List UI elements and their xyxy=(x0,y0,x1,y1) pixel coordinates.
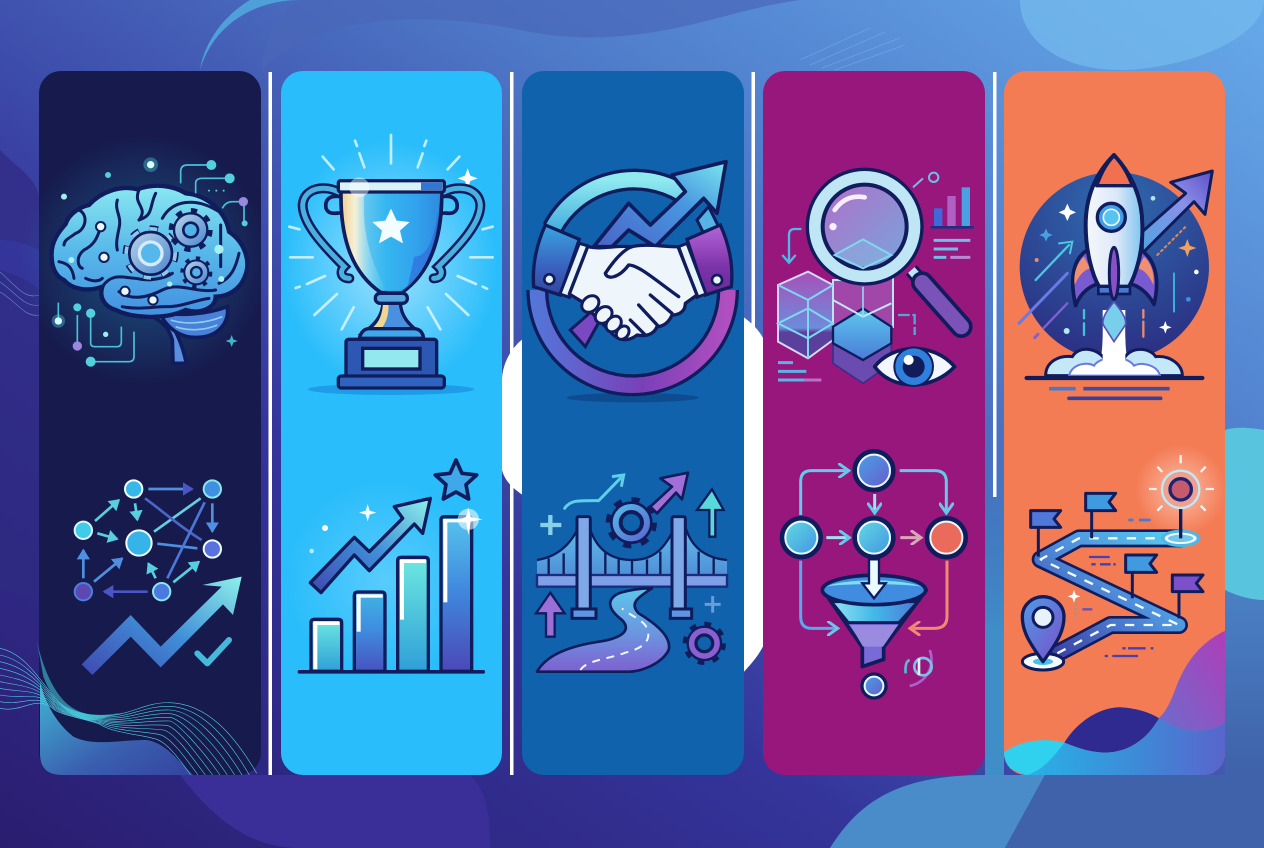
icon: flowchart and funnel xyxy=(782,451,966,698)
circuit traces xyxy=(58,165,244,362)
icon: network graph and rising arrow xyxy=(75,480,242,675)
icon: trophy xyxy=(289,135,493,395)
icon: bar chart with arrow and star xyxy=(298,460,485,674)
icon: winding route with flags and pins xyxy=(1022,445,1226,670)
panel 4: magenta xyxy=(763,71,985,775)
icon: brain with gears xyxy=(52,157,248,367)
icon: magnifier, cubes and eye xyxy=(778,169,974,386)
wave decoration xyxy=(0,640,257,775)
icon: handshake in ring with arrow xyxy=(533,162,732,402)
panel 3: deep blue xyxy=(522,71,744,775)
gears xyxy=(127,211,210,286)
icon: rocket launch xyxy=(1019,155,1212,398)
bottom waves xyxy=(1003,630,1227,777)
panel 1: dark navy xyxy=(0,71,270,775)
white dividers and blobs xyxy=(268,72,996,775)
panel 2: bright blue xyxy=(281,71,502,775)
icon: bridge, road, gears and arrows xyxy=(536,473,727,672)
panel 5: orange xyxy=(1003,71,1227,777)
